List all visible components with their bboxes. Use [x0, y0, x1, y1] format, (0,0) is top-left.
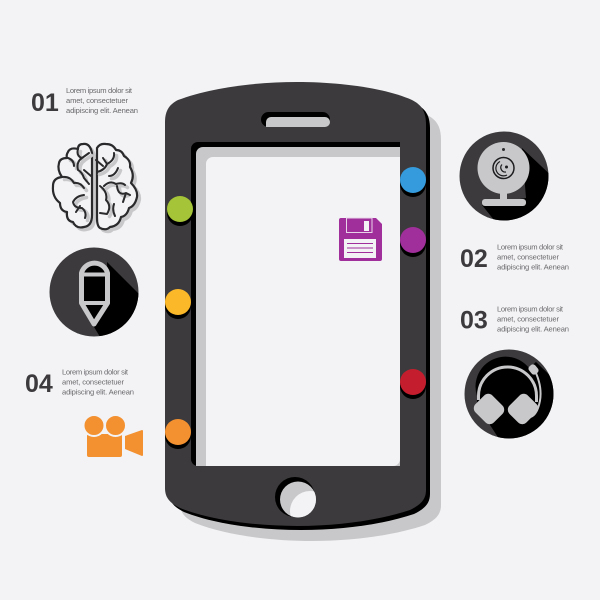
text block 04: Lorem ipsum dolor sit [62, 368, 129, 376]
icon: headset [464, 350, 554, 438]
label 02: 02 [460, 245, 488, 273]
text block 01: amet, consectetuer [66, 96, 128, 105]
phone [165, 82, 441, 541]
brain fold shadows [64, 152, 128, 220]
label 04 [25, 368, 134, 398]
dot: yellow [165, 289, 191, 319]
headset long shadow [476, 356, 554, 438]
text block 03: adipiscing elit. Aenean [497, 324, 569, 334]
phone shadow [180, 97, 441, 541]
icon: video camera [84, 415, 143, 457]
text block 02: adipiscing elit. Aenean [497, 262, 569, 272]
phone body [165, 82, 426, 526]
text block 01: Lorem ipsum dolor sit [66, 86, 133, 95]
text block 02: Lorem ipsum dolor sit [497, 242, 564, 252]
icon: pencil [50, 248, 138, 336]
screen [191, 142, 400, 466]
label 02 [460, 242, 569, 273]
text block 04: adipiscing elit. Aenean [62, 388, 134, 396]
icon: webcam [460, 132, 548, 220]
icon: floppy disk [339, 218, 382, 261]
dot: green [167, 196, 193, 226]
label 03 [460, 304, 569, 334]
dot: purple [400, 227, 426, 257]
dot: red [400, 369, 426, 399]
label 03: 03 [460, 306, 488, 334]
webcam long shadow [482, 148, 548, 220]
text block 01: adipiscing elit. Aenean [66, 106, 138, 115]
label 01: 01 [31, 89, 59, 117]
speaker [261, 112, 330, 127]
infographic [26, 82, 568, 541]
phone dark edge [169, 86, 430, 530]
text block 04: amet, consectetuer [62, 378, 124, 386]
dot: orange [165, 419, 191, 449]
text block 03: Lorem ipsum dolor sit [497, 304, 564, 314]
text block 03: amet, consectetuer [497, 314, 559, 324]
icon: brain [53, 144, 140, 232]
home button [275, 477, 316, 518]
label 01 [31, 86, 138, 117]
text block 02: amet, consectetuer [497, 252, 559, 262]
dot: blue [400, 167, 426, 197]
label 04: 04 [25, 370, 53, 398]
pencil long shadow [94, 262, 138, 336]
